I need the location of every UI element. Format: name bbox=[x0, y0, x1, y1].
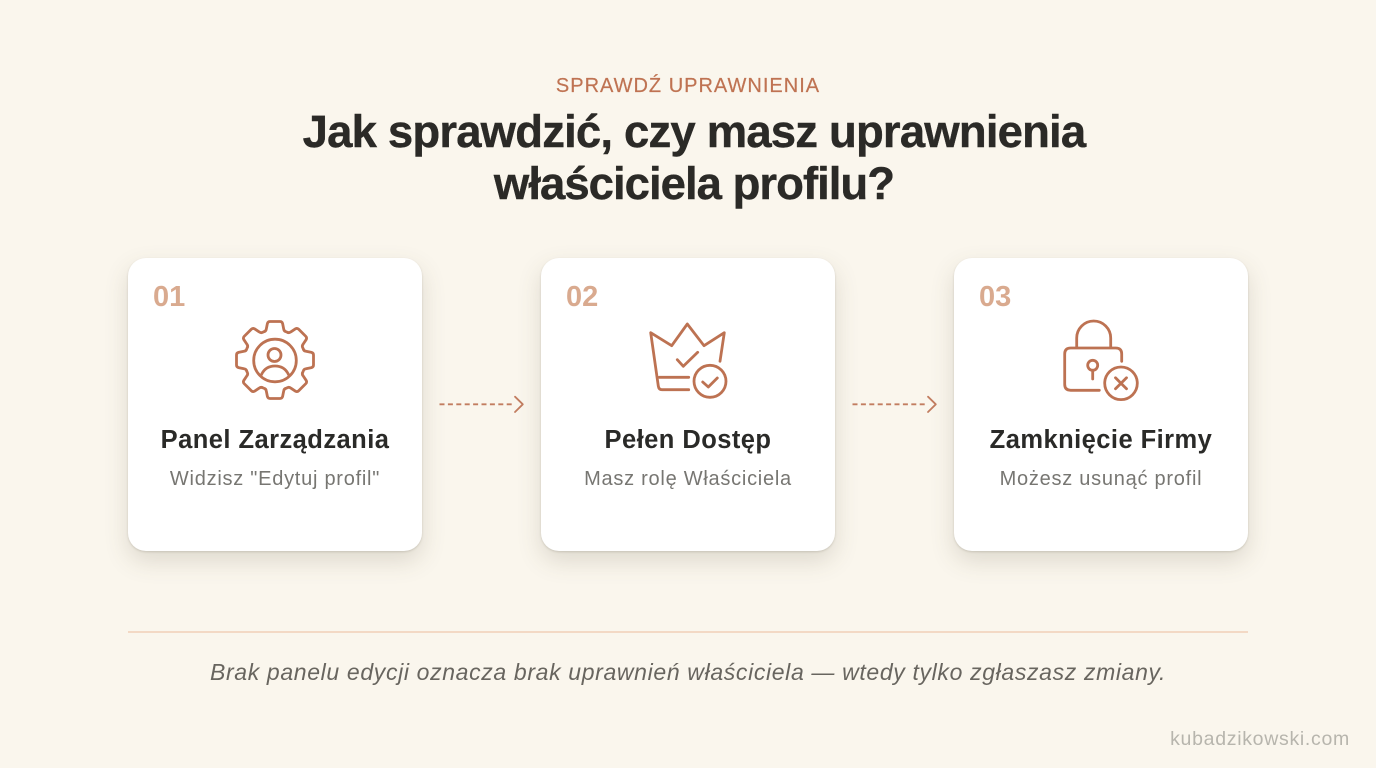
panel: step 1 Panel Zarządzania bbox=[128, 258, 422, 551]
watermark: kubadzikowski.com bbox=[1170, 728, 1350, 750]
icon: gear with user bbox=[235, 320, 315, 400]
step heading: Panel Zarządzania bbox=[161, 426, 389, 454]
icon: crown with check bbox=[649, 322, 728, 399]
step description: Możesz usunąć profil bbox=[1000, 468, 1202, 490]
title: Jak sprawdzić, czy masz uprawnienia bbox=[303, 106, 1085, 157]
footnote: Brak panelu edycji oznacza brak uprawnień właściciela — wtedy tylko zgłaszasz zmiany. bbox=[210, 659, 1166, 685]
step heading: Zamknięcie Firmy bbox=[990, 426, 1212, 454]
title bbox=[303, 106, 1087, 209]
kicker label: SPRAWDŹ UPRAWNIENIA bbox=[556, 75, 820, 97]
panel: step 2 Pełen Dostęp bbox=[541, 258, 835, 551]
step number 01: 01 bbox=[153, 281, 185, 313]
step heading: Pełen Dostęp bbox=[605, 426, 771, 454]
panel: step 3 Zamknięcie Firmy bbox=[954, 258, 1248, 551]
step description: Masz rolę Właściciela bbox=[584, 468, 792, 490]
title: właściciela profilu? bbox=[494, 158, 894, 209]
step number 02: 02 bbox=[566, 281, 598, 313]
arrow: step 1 to step 2 bbox=[440, 396, 524, 413]
arrow: step 2 to step 3 bbox=[852, 396, 937, 413]
icon: padlock with x bbox=[1063, 320, 1139, 401]
step description: Widzisz "Edytuj profil" bbox=[170, 468, 380, 490]
step number 03: 03 bbox=[979, 281, 1011, 313]
